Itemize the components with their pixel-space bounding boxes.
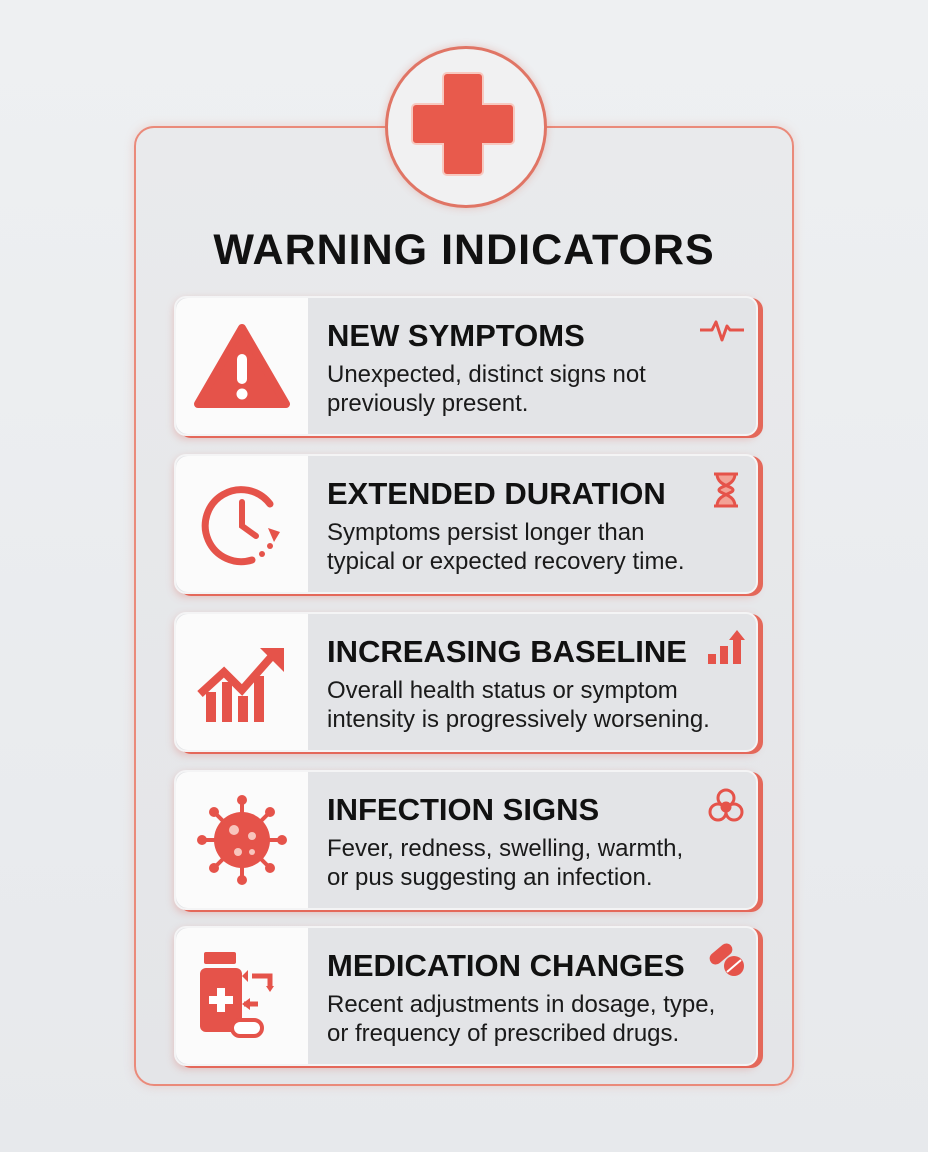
- icon: clock: [176, 456, 308, 592]
- icon: biohazard: [708, 788, 744, 822]
- card: medication changes: MEDICATION CHANGES: [327, 948, 685, 983]
- icon: warning triangle: [176, 298, 308, 434]
- card: extended duration: EXTENDED DURATION: [327, 476, 666, 511]
- icon: rising chart: [176, 614, 308, 750]
- card: medication changes: Recent adjustments in dosage, type,: [327, 991, 715, 1018]
- card: infection signs: Fever, redness, swelling, warmth,: [327, 835, 683, 862]
- title: WARNING INDICATORS: [213, 226, 715, 274]
- card: new symptoms: previously present.: [327, 390, 528, 417]
- card: new symptoms: Unexpected, distinct signs not: [327, 361, 646, 388]
- card: increasing baseline: [174, 612, 758, 752]
- card: new symptoms: NEW SYMPTOMS: [327, 318, 585, 353]
- card: extended duration: [174, 454, 758, 594]
- icon: hourglass: [714, 472, 738, 508]
- card: increasing baseline: INCREASING BASELINE: [327, 634, 687, 669]
- card: extended duration: Symptoms persist longer than: [327, 519, 644, 546]
- icon: pills: [710, 944, 744, 976]
- card: infection signs: [174, 770, 758, 910]
- icon: medical cross badge: [385, 46, 547, 208]
- card: medication changes: or frequency of prescribed drugs.: [327, 1020, 679, 1047]
- card: new symptoms: [174, 296, 758, 436]
- card: infection signs: or pus suggesting an infection.: [327, 864, 653, 891]
- card: medication changes: [174, 926, 758, 1066]
- icon: pulse: [700, 320, 744, 342]
- card: increasing baseline: intensity is progressively worsening.: [327, 706, 710, 733]
- main panel: [134, 126, 794, 1086]
- card: increasing baseline: Overall health status or symptom: [327, 677, 678, 704]
- icon: virus: [176, 772, 308, 908]
- icon: medicine bottle: [176, 928, 308, 1064]
- card: infection signs: INFECTION SIGNS: [327, 792, 599, 827]
- card: extended duration: typical or expected recovery time.: [327, 548, 684, 575]
- icon: small bar chart: [708, 630, 745, 664]
